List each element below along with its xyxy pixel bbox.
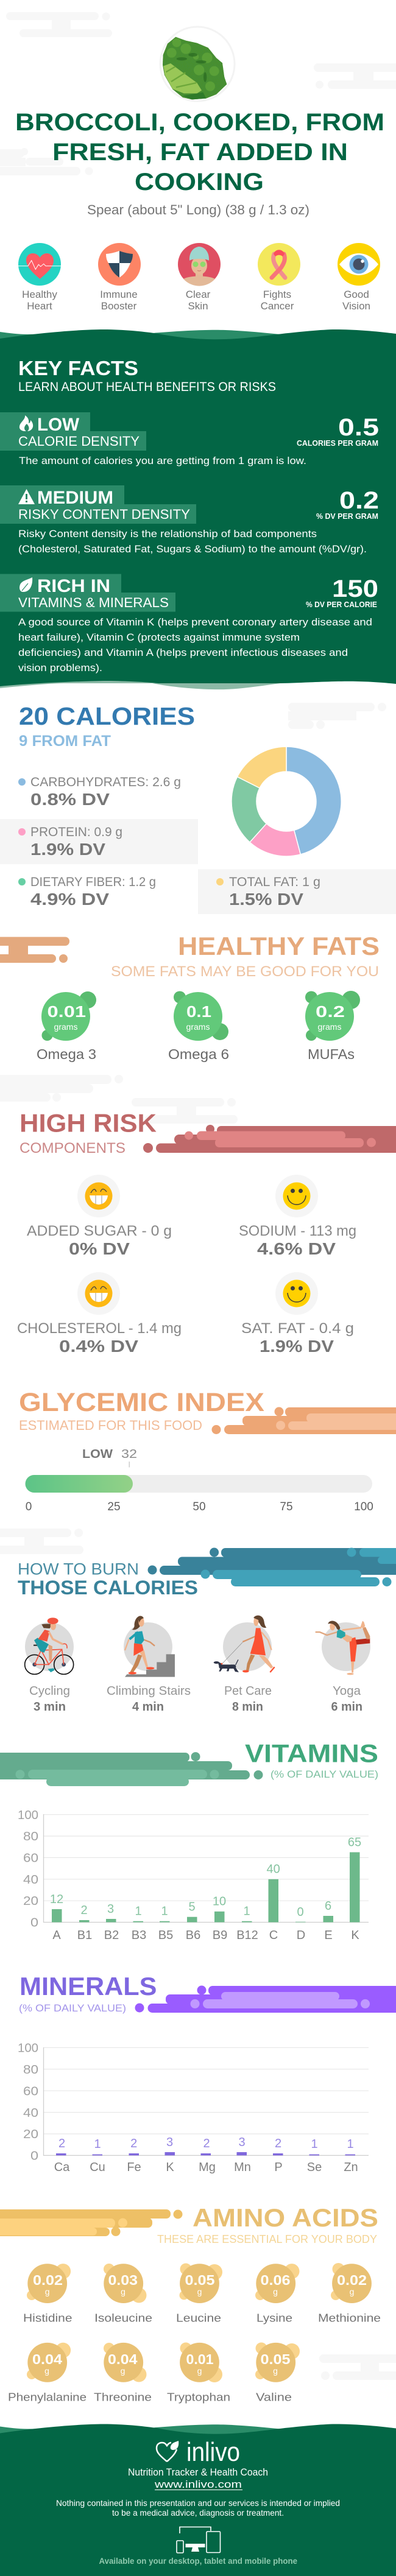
fat: omega 6	[168, 991, 229, 1062]
fact: rich in vitamins and minerals: deficiencies) and Vitamin A (helps prevent infectious diseases and	[18, 647, 348, 658]
heading: calories: 9 FROM FAT	[19, 733, 111, 750]
amino: threonine: g	[121, 2366, 125, 2376]
bar chart: minerals: 100	[18, 2041, 38, 2055]
bar chart: minerals	[18, 2041, 369, 2174]
fat: mufas	[305, 991, 360, 1062]
heading: vitamins: VITAMINS	[245, 1739, 378, 1767]
amino: valine: 0.05	[261, 2351, 291, 2367]
bar chart: vitamins: B1	[77, 1929, 92, 1942]
fact: medium risky content density: (Cholesterol, Saturated Fat, Sugars & Sodium) to the amount (%DV/gr).	[18, 543, 367, 555]
activity: climbing stairs: 4 min	[132, 1700, 164, 1714]
item: sodium: 4.6% DV	[257, 1239, 336, 1258]
heading: minerals: (% OF DAILY VALUE)	[19, 2002, 126, 2014]
heading: vitamins: (% OF DAILY VALUE)	[270, 1768, 378, 1780]
bar chart: vitamins: 100	[18, 1809, 38, 1822]
fact: rich in vitamins and minerals: VITAMINS & MINERALS	[18, 595, 169, 610]
legend: total fat: TOTAL FAT: 1 g	[229, 875, 320, 889]
title: BROCCOLI, COOKED, FROM	[15, 109, 384, 136]
amino: leucine: 0.05	[185, 2272, 215, 2288]
heading: minerals	[19, 1972, 157, 2014]
bar chart: minerals: Fe	[127, 2161, 141, 2174]
heading: healthy fats	[111, 932, 380, 980]
item: added sugar	[27, 1175, 172, 1258]
bar chart: vitamins: 40	[23, 1873, 38, 1887]
gauge label: low 32: LOW	[82, 1448, 113, 1461]
benefit labels: Healthy	[22, 289, 57, 300]
heading: calories	[19, 702, 195, 750]
section: high risk components	[17, 1108, 396, 1356]
bar chart: vitamins: K	[351, 1929, 359, 1942]
panel: key facts	[0, 329, 396, 689]
heading: how to burn those calories	[18, 1560, 198, 1599]
health benefit icons	[18, 243, 380, 312]
fact: medium risky content density: Risky Content density is the relationship of bad components	[18, 528, 317, 540]
gauge scale: 100	[354, 1501, 373, 1513]
amino: methionine: Methionine	[318, 2312, 381, 2324]
fat: omega 3: 0.01	[48, 1002, 86, 1021]
fat: omega 3: Omega 3	[37, 1046, 96, 1062]
icon: clear skin	[178, 243, 221, 286]
decorative banner: burn calories	[147, 1548, 396, 1586]
legend: protein	[18, 825, 122, 859]
decorative banner: vitamins	[0, 1752, 263, 1786]
amino: valine: Valine	[256, 2391, 292, 2403]
macronutrient legend	[0, 775, 396, 914]
activity: yoga	[316, 1621, 370, 1714]
amino: methionine: 0.02	[337, 2272, 367, 2288]
icon: healthy heart	[18, 243, 61, 286]
heading: healthy fats: HEALTHY FATS	[178, 932, 380, 960]
fact: medium risky content density: MEDIUM	[37, 488, 113, 508]
icon: immune shield	[98, 243, 141, 286]
amino: histidine	[23, 2264, 72, 2324]
bar chart: minerals: 1	[94, 2138, 101, 2151]
heading: vitamins	[245, 1739, 378, 1780]
benefit labels: Heart	[27, 300, 52, 312]
icon: devices	[177, 2527, 221, 2553]
legend: protein: PROTEIN: 0.9 g	[30, 825, 122, 839]
benefit labels: Cancer	[261, 300, 294, 312]
heading: how to burn those calories: HOW TO BURN	[18, 1560, 139, 1578]
activity: cycling: Cycling	[29, 1684, 70, 1698]
amino: threonine: 0.04	[108, 2351, 138, 2367]
gauge scale	[26, 1501, 373, 1513]
section: vitamins	[0, 1739, 378, 1942]
bar chart: minerals: Zn	[344, 2161, 358, 2174]
fact: low calorie density: CALORIES PER GRAM	[297, 438, 378, 448]
fat: omega 6: Omega 6	[168, 1046, 229, 1062]
activity: pet care: Pet Care	[224, 1684, 272, 1698]
fat: mufas: 0.2	[316, 1002, 345, 1021]
legend: dietary fiber: 4.9% DV	[30, 890, 109, 909]
bar chart: vitamins: B6	[186, 1929, 200, 1942]
bar chart: vitamins: 0	[297, 1906, 304, 1919]
heading: minerals: MINERALS	[19, 1972, 157, 2001]
fat: omega 3	[37, 991, 96, 1062]
bar chart: minerals: 60	[23, 2085, 38, 2099]
fact: low calorie density: LOW	[37, 415, 80, 435]
item: saturated fat	[241, 1272, 354, 1356]
activity: pet care	[214, 1616, 275, 1714]
amino: tryptophan: 0.01	[186, 2351, 214, 2367]
activity: yoga: Yoga	[333, 1684, 361, 1698]
gauge scale: 75	[280, 1501, 293, 1513]
bar chart: vitamins: 65	[348, 1835, 361, 1849]
benefit labels: Booster	[101, 300, 137, 312]
gauge label: low 32: 32	[121, 1448, 137, 1461]
bar chart: minerals: 80	[23, 2063, 38, 2077]
amino: phenylalanine: 0.04	[32, 2351, 62, 2367]
amino: threonine: Threonine	[94, 2391, 152, 2403]
gauge scale: 0	[26, 1501, 32, 1513]
footer: disclaimer	[56, 2498, 340, 2518]
bar chart: vitamins: B2	[104, 1929, 119, 1942]
benefit labels: Fights	[263, 289, 291, 300]
amino: threonine	[94, 2343, 152, 2403]
title	[15, 109, 384, 195]
section: glycemic index	[19, 1388, 396, 1513]
legend: total fat: 1.5% DV	[229, 890, 303, 909]
amino: lysine: 0.06	[261, 2272, 290, 2288]
heading: high risk: HIGH RISK	[19, 1108, 157, 1138]
item: added sugar: 0% DV	[69, 1239, 130, 1258]
bar chart: vitamins: 80	[23, 1830, 38, 1843]
benefit labels: Immune	[100, 289, 138, 300]
section: minerals	[18, 1972, 396, 2174]
bar chart: minerals: 3	[166, 2136, 173, 2149]
heading: key facts	[18, 357, 276, 394]
heading: glycemic index: GLYCEMIC INDEX	[19, 1388, 264, 1417]
bar chart: vitamins: 2	[80, 1904, 88, 1917]
bar chart: vitamins: 40	[266, 1862, 280, 1876]
gauge scale: 50	[193, 1501, 206, 1513]
bar chart: minerals: K	[166, 2161, 174, 2174]
bar chart: vitamins: 0	[30, 1916, 38, 1929]
fact: low calorie density: The amount of calories you are getting from 1 gram is low.	[19, 455, 306, 466]
footer: availability note: Available on your desktop, tablet and mobile phone	[99, 2556, 297, 2566]
amino: leucine	[176, 2263, 222, 2324]
footer: tagline and website: Nutrition Tracker & Health Coach	[128, 2466, 268, 2478]
bar chart: vitamins: 5	[188, 1900, 196, 1913]
bar chart: minerals: 40	[23, 2106, 38, 2120]
fat: omega 3: grams	[54, 1022, 77, 1032]
heading: glycemic index	[19, 1388, 264, 1433]
bar chart: minerals: P	[274, 2161, 283, 2174]
bar chart: minerals: Ca	[54, 2161, 70, 2174]
heading: high risk	[19, 1108, 157, 1156]
amino: histidine: 0.02	[33, 2272, 63, 2288]
amino: leucine: Leucine	[176, 2312, 221, 2324]
footer: disclaimer: to be a medical advice, diagnosis or treatment.	[112, 2508, 284, 2518]
fact: rich in vitamins and minerals: vision problems).	[18, 662, 102, 674]
decorative banner: minerals	[135, 1985, 396, 2013]
activity: cycling	[25, 1617, 74, 1714]
decorative banner: amino acids	[0, 2209, 183, 2236]
legend: dietary fiber: DIETARY FIBER: 1.2 g	[30, 875, 156, 889]
item: cholesterol: CHOLESTEROL - 1.4 mg	[17, 1320, 182, 1337]
bar chart: vitamins: 3	[107, 1902, 114, 1916]
amino: phenylalanine: g	[44, 2366, 49, 2376]
bar chart: vitamins: 6	[325, 1899, 331, 1913]
bar chart: vitamins: 12	[50, 1893, 63, 1906]
amino: leucine: g	[197, 2287, 202, 2296]
activity: pet care: 8 min	[232, 1700, 263, 1714]
decorative banner: healthy fats	[0, 937, 69, 963]
amino: lysine	[255, 2264, 300, 2324]
amino: histidine: g	[45, 2287, 50, 2296]
bar chart: minerals: 3	[238, 2136, 246, 2149]
bar chart: vitamins: D	[297, 1929, 305, 1942]
benefit labels	[22, 289, 370, 312]
amino: isoleucine: 0.03	[108, 2272, 138, 2288]
bar chart: minerals: Mg	[199, 2161, 216, 2174]
icon: cancer ribbon	[258, 243, 300, 286]
section: amino acids	[0, 2203, 381, 2403]
bar chart: vitamins: 20	[23, 1895, 38, 1908]
fact: rich in vitamins and minerals: % DV PER CALORIE	[306, 600, 377, 609]
bar chart: vitamins: E	[324, 1929, 333, 1942]
item: sodium: SODIUM - 113 mg	[239, 1223, 356, 1239]
bar chart: minerals: 2	[58, 2137, 65, 2150]
footer: disclaimer: Nothing contained in this presentation and our services is intended or implied	[56, 2498, 340, 2508]
item: cholesterol: 0.4% DV	[59, 1337, 138, 1356]
bar chart: vitamins: B5	[158, 1929, 173, 1942]
legend: carbohydrates: CARBOHYDRATES: 2.6 g	[30, 775, 181, 789]
bar chart: vitamins: A	[52, 1929, 61, 1942]
logo: inlivo: inlivo	[186, 2437, 240, 2467]
gauge label: low 32	[82, 1448, 137, 1468]
benefit labels: Skin	[188, 300, 208, 312]
activity: cycling: 3 min	[34, 1700, 66, 1714]
activity: climbing stairs	[107, 1616, 191, 1714]
amino: valine	[255, 2342, 300, 2403]
heading: healthy fats: SOME FATS MAY BE GOOD FOR YOU	[111, 963, 379, 980]
bar chart: minerals: 2	[130, 2137, 137, 2150]
bar chart: minerals: Cu	[90, 2161, 105, 2174]
amino: isoleucine: g	[121, 2287, 126, 2296]
fact: medium risky content density: 0.2	[339, 487, 379, 514]
bar chart: minerals: 2	[203, 2137, 210, 2150]
bar chart: vitamins: 1	[243, 1905, 250, 1918]
item: sodium	[239, 1175, 356, 1258]
heading: how to burn those calories: THOSE CALORIES	[18, 1577, 198, 1599]
amino: methionine	[318, 2263, 381, 2324]
fact: rich in vitamins and minerals: A good source of Vitamin K (helps prevent coronary artery disease and	[18, 616, 372, 628]
bar chart: vitamins: 60	[23, 1851, 38, 1865]
benefit labels: Clear	[186, 289, 211, 300]
bar chart: vitamins: 1	[161, 1905, 168, 1918]
bar chart: vitamins: B9	[213, 1929, 227, 1942]
bar chart: vitamins: C	[269, 1929, 278, 1942]
footer: tagline and website: www.inlivo.com	[154, 2479, 242, 2490]
bar chart: minerals: Se	[307, 2161, 322, 2174]
item: cholesterol	[17, 1272, 182, 1356]
title: COOKING	[135, 169, 264, 195]
legend: protein: 1.9% DV	[30, 840, 105, 859]
amino: isoleucine	[94, 2264, 152, 2324]
bar chart: vitamins: 1	[135, 1905, 142, 1918]
amino: phenylalanine: Phenylalanine	[8, 2391, 87, 2403]
decorative banner: high risk	[143, 1125, 396, 1153]
heading: calories: 20 CALORIES	[19, 702, 195, 730]
gauge scale: 25	[107, 1501, 121, 1513]
icon: good vision eye	[338, 243, 380, 286]
bar chart: minerals: 1	[347, 2138, 354, 2151]
fact: low calorie density: CALORIE DENSITY	[18, 434, 140, 449]
amino: lysine: Lysine	[256, 2312, 292, 2324]
heading: amino acids: AMINO ACIDS	[193, 2203, 378, 2232]
heading: high risk: COMPONENTS	[19, 1140, 126, 1156]
bar chart: vitamins	[18, 1809, 369, 1942]
footer	[0, 2424, 396, 2576]
section: healthy fats	[0, 932, 380, 1062]
amino: lysine: g	[273, 2287, 278, 2296]
heading: amino acids: THESE ARE ESSENTIAL FOR YOUR BODY	[157, 2233, 377, 2245]
fat: mufas: MUFAs	[308, 1046, 355, 1062]
amino: methionine: g	[350, 2287, 354, 2296]
fact: rich in vitamins and minerals: heart failure), Vitamin C (protects against immune system	[18, 632, 300, 643]
item: added sugar: ADDED SUGAR - 0 g	[27, 1223, 172, 1239]
fat: mufas: grams	[318, 1022, 341, 1032]
benefit labels: Good	[344, 289, 369, 300]
title: FRESH, FAT ADDED IN	[52, 139, 348, 166]
fact: rich in vitamins and minerals: 150	[332, 575, 378, 602]
amino: valine: g	[273, 2366, 278, 2376]
amino: isoleucine: Isoleucine	[94, 2312, 152, 2324]
amino: tryptophan: g	[197, 2366, 202, 2376]
bar chart: minerals: 1	[311, 2138, 318, 2151]
fact: low calorie density: 0.5	[338, 414, 379, 441]
icon: broccoli photo	[160, 27, 235, 101]
amino: phenylalanine	[8, 2343, 87, 2403]
benefit labels: Vision	[342, 300, 370, 312]
gauge bar	[26, 1475, 372, 1493]
legend: dietary fiber	[18, 875, 156, 909]
fact: medium risky content density: RISKY CONTENT DENSITY	[18, 507, 190, 522]
bar chart: vitamins: B12	[236, 1929, 258, 1942]
fact: medium risky content density: % DV PER GRAM	[316, 512, 378, 521]
bar chart: minerals: 2	[275, 2137, 281, 2150]
serving size subtitle: Spear (about 5" Long) (38 g / 1.3 oz)	[87, 202, 309, 217]
legend: total fat	[216, 875, 320, 909]
activity: climbing stairs: Climbing Stairs	[107, 1684, 191, 1698]
fact: low calorie density	[0, 412, 379, 466]
donut chart: macronutrients	[232, 747, 341, 856]
heading: key facts: KEY FACTS	[18, 357, 138, 379]
item: saturated fat: SAT. FAT - 0.4 g	[241, 1320, 354, 1337]
item: saturated fat: 1.9% DV	[260, 1337, 334, 1356]
amino: tryptophan: Tryptophan	[167, 2391, 230, 2403]
logo: inlivo	[157, 2437, 240, 2467]
amino: histidine: Histidine	[23, 2312, 72, 2324]
amino: tryptophan	[167, 2342, 230, 2403]
heading: key facts: LEARN ABOUT HEALTH BENEFITS OR RISKS	[18, 380, 276, 394]
heading: amino acids	[157, 2203, 378, 2245]
activity: yoga: 6 min	[331, 1700, 362, 1714]
legend: carbohydrates	[18, 775, 181, 809]
fact: rich in vitamins and minerals: RICH IN	[37, 576, 110, 596]
fact: medium risky content density	[0, 485, 379, 555]
bar chart: vitamins: B3	[132, 1929, 146, 1942]
bar chart: minerals: 20	[23, 2128, 38, 2141]
fat: omega 6: 0.1	[186, 1002, 211, 1021]
bar chart: minerals: 0	[30, 2150, 38, 2163]
bar chart: vitamins: 10	[213, 1895, 226, 1909]
legend: carbohydrates: 0.8% DV	[30, 790, 110, 809]
bar chart: minerals: Mn	[234, 2161, 251, 2174]
footer: tagline and website	[128, 2466, 268, 2490]
section: how to burn calories	[18, 1548, 396, 1714]
fat: omega 6: grams	[186, 1022, 210, 1032]
decorative banner: glycemic index	[212, 1407, 396, 1434]
heading: glycemic index: ESTIMATED FOR THIS FOOD	[19, 1418, 202, 1433]
fact: rich in vitamins and minerals	[0, 574, 378, 674]
